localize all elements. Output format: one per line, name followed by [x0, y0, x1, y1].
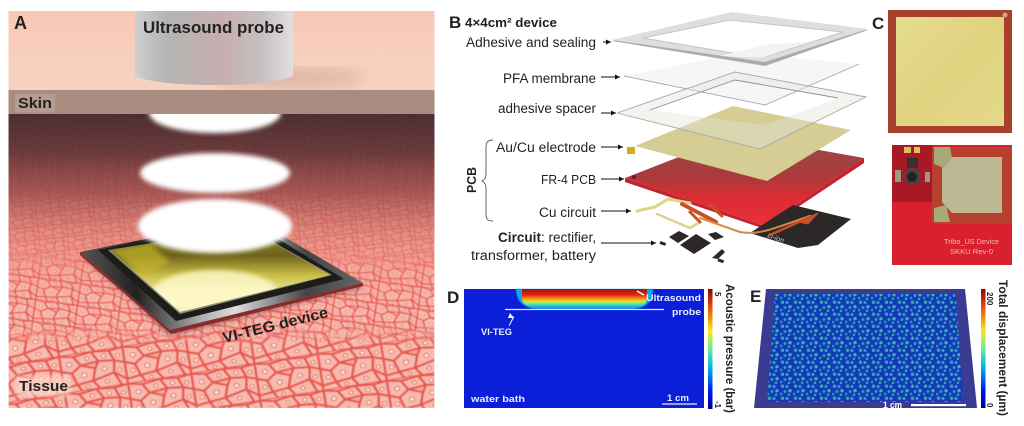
panel C: circuit board photo: SKKU Rev-0: [950, 247, 993, 256]
panel B letter: B: [449, 13, 461, 32]
ultrasound wave 2: [140, 153, 290, 193]
label: FR-4 PCB: FR-4 PCB: [541, 173, 596, 187]
label: circuit components: transformer, battery: [471, 248, 596, 263]
label: adhesive spacer: adhesive spacer: [498, 101, 597, 116]
heading: device size: 4×4cm² device: [465, 15, 557, 30]
panel D: acoustic pressure map: water bath: [470, 394, 525, 405]
panel D: acoustic pressure map: Ultrasound: [646, 293, 701, 304]
colorbar: acoustic pressure: Acoustic pressure (bar): [723, 284, 737, 413]
panel C: electrode photo: [888, 10, 1012, 133]
label: skin: Skin: [18, 95, 52, 112]
colorbar: total displacement: 0: [985, 403, 994, 408]
label: circuit components: Circuit: rectifier,: [498, 230, 596, 245]
ultrasound wave 1: [146, 114, 284, 137]
label: Cu circuit: [539, 205, 631, 220]
icon: ultrasound probe cylinder: [135, 11, 293, 85]
panel D: acoustic pressure map: [464, 289, 704, 408]
layer: PCB and electrode: [625, 106, 864, 229]
layer: Cu circuit: [637, 199, 818, 235]
panel D: acoustic pressure map: probe: [672, 307, 701, 318]
layer: battery: [750, 205, 851, 248]
panel D: acoustic pressure map: VI-TEG: [481, 327, 512, 338]
label backing: skin: [15, 94, 55, 112]
colorbar: total displacement: 200: [985, 292, 994, 306]
label: tissue: Tissue: [19, 378, 68, 395]
colorbar: total displacement: Total displacement (µm): [996, 280, 1010, 416]
layer: battery: Li-ion: [766, 232, 785, 245]
label: ultrasound probe: Ultrasound probe: [143, 18, 284, 37]
panel C: circuit board photo: [892, 145, 1012, 265]
device: VI-TEG: [80, 236, 363, 338]
label: Au/Cu electrode: Au/Cu electrode: [496, 140, 596, 155]
ultrasound wave 3: [138, 199, 292, 253]
colorbar: acoustic pressure: [708, 284, 737, 413]
layer: adhesive spacer: [617, 72, 866, 149]
panel C: circuit board photo: Tribo_US Device: [944, 237, 999, 246]
label backing: tissue: [16, 376, 70, 396]
colorbar: total displacement: [981, 280, 1010, 416]
PCB bracket and label: PCB: [464, 167, 479, 193]
panel E letter: E: [750, 287, 761, 306]
label: Cu circuit: Cu circuit: [539, 205, 596, 220]
layer: circuit chips: [659, 231, 725, 263]
label: FR-4 PCB: [541, 173, 624, 187]
panel E: total displacement map: 1 cm: [883, 400, 902, 411]
panel C letter: C: [872, 14, 884, 33]
layer: adhesive and sealing frame: [612, 12, 868, 66]
label: PFA membrane: PFA membrane: [503, 71, 596, 86]
colorbar: acoustic pressure: 5: [713, 292, 722, 297]
tissue layer with cells: [8, 114, 434, 408]
probe shadow: [215, 68, 365, 88]
skin layer band: [8, 90, 434, 114]
label: circuit components: [471, 230, 656, 263]
label: adhesive and sealing: Adhesive and sealing: [466, 35, 596, 50]
panel B: exploded device layers: [612, 12, 868, 263]
panel D: acoustic pressure map: 1 cm: [667, 393, 689, 404]
panel A letter: A: [14, 13, 27, 33]
label: VI-TEG device: VI-TEG device: [221, 304, 330, 347]
panel A: ultrasound probe over tissue: [8, 11, 434, 408]
panel E: total displacement map: [754, 289, 977, 411]
PCB bracket and label: [464, 140, 493, 221]
layer: PFA membrane: [624, 53, 859, 105]
panel D letter: D: [447, 288, 459, 307]
skin surface background: [8, 11, 434, 91]
colorbar: acoustic pressure: -1: [713, 401, 722, 409]
